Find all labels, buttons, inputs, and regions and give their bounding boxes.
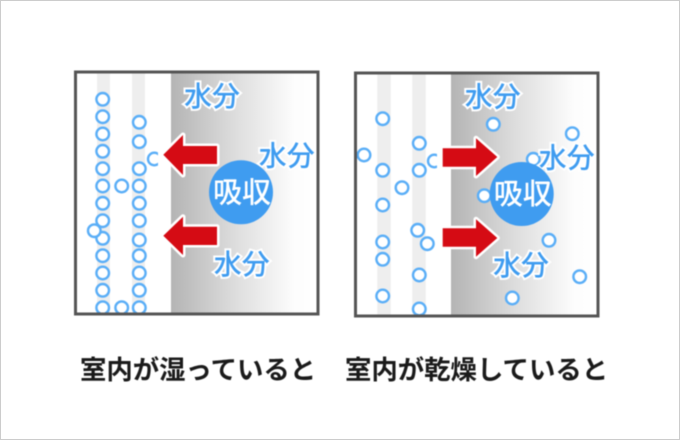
moisture particles scattered <box>358 112 586 315</box>
panel: humid room <box>76 72 318 314</box>
caption: humid room: 室内が湿っていると <box>80 355 316 385</box>
badge: absorption: 吸収 <box>213 178 271 210</box>
arrow: upper right <box>443 138 497 176</box>
arrow: lower right <box>443 219 497 257</box>
badge: absorption <box>209 160 273 224</box>
caption: dry room: 室内が乾燥していると <box>345 355 608 385</box>
label: moisture right: 水分 <box>539 142 595 174</box>
label: moisture bottom: 水分 <box>493 250 549 281</box>
label: moisture top: 水分 <box>465 82 521 112</box>
label: moisture top: 水分 <box>184 81 240 112</box>
badge: absorption: 吸収 <box>494 179 552 211</box>
label: moisture right: 水分 <box>259 140 315 172</box>
badge: absorption <box>490 162 554 226</box>
moisture particles in wall <box>88 93 161 314</box>
arrow: lower left <box>163 217 217 255</box>
label: moisture bottom: 水分 <box>214 249 270 280</box>
arrow: upper left <box>163 135 217 175</box>
panel: dry room <box>356 73 598 316</box>
